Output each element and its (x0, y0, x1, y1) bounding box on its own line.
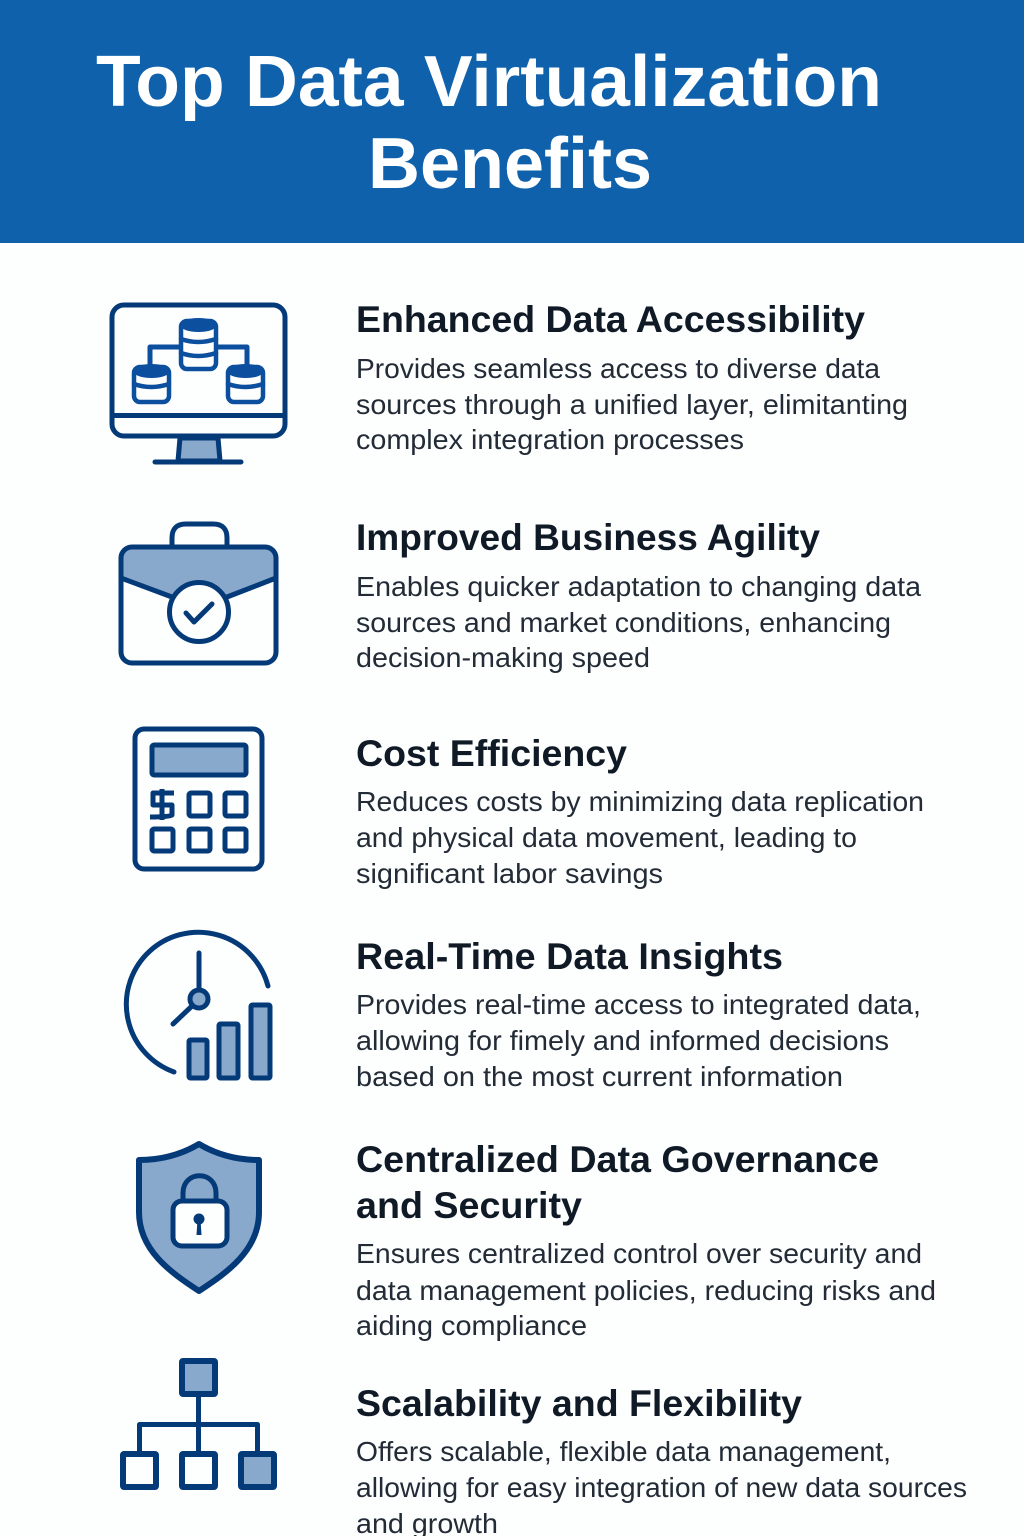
heading: Enhanced Data Accessibility (356, 299, 865, 340)
title: Top Data Virtualization (96, 42, 882, 122)
icon: hierarchy tree (123, 1361, 274, 1487)
description: Ensures centralized control over security and (356, 1238, 922, 1269)
description (356, 786, 924, 889)
description: sources through a unified layer, elimitanting (356, 389, 908, 420)
description: allowing for fimely and informed decisions (356, 1025, 889, 1056)
panel: cost efficiency (135, 729, 924, 889)
description: significant labor savings (356, 858, 663, 889)
description: and physical data movement, leading to (356, 822, 857, 853)
description (356, 1436, 967, 1536)
heading: Scalability and Flexibility (356, 1383, 802, 1424)
header banner (0, 0, 1024, 243)
icon: calculator (135, 729, 262, 869)
description: Provides real-time access to integrated data, (356, 989, 921, 1020)
description (356, 571, 922, 673)
icon: clock with bar chart (126, 932, 270, 1078)
description: complex integration processes (356, 424, 744, 455)
description: allowing for easy integration of new data sources (356, 1472, 967, 1503)
heading: Centralized Data Governance (356, 1139, 879, 1180)
description: Provides seamless access to diverse data (356, 353, 881, 384)
description: data management policies, reducing risks and (356, 1275, 936, 1306)
heading (356, 1139, 879, 1226)
icon: monitor with databases (112, 305, 285, 462)
description: Offers scalable, flexible data management, (356, 1436, 891, 1467)
icon: briefcase with check (121, 524, 276, 663)
panel: scalability and flexibility (123, 1361, 967, 1536)
panel: centralized data governance and security (139, 1139, 936, 1341)
description (356, 1238, 936, 1341)
panel: real-time data insights (126, 932, 921, 1092)
panel: improved business agility (121, 517, 922, 673)
description: sources and market conditions, enhancing (356, 607, 891, 638)
panel: enhanced data accessibility (112, 299, 908, 462)
heading: Real-Time Data Insights (356, 936, 783, 977)
description (356, 989, 921, 1092)
description: Enables quicker adaptation to changing data (356, 571, 922, 602)
description: based on the most current information (356, 1061, 843, 1092)
description (356, 353, 908, 455)
title: Benefits (368, 124, 652, 204)
heading: and Security (356, 1185, 582, 1226)
description: decision-making speed (356, 642, 650, 673)
icon: shield with padlock (139, 1144, 259, 1291)
description: Reduces costs by minimizing data replication (356, 786, 924, 817)
heading: Improved Business Agility (356, 517, 820, 558)
heading: Cost Efficiency (356, 733, 627, 774)
description: aiding compliance (356, 1310, 587, 1341)
title (96, 42, 882, 204)
